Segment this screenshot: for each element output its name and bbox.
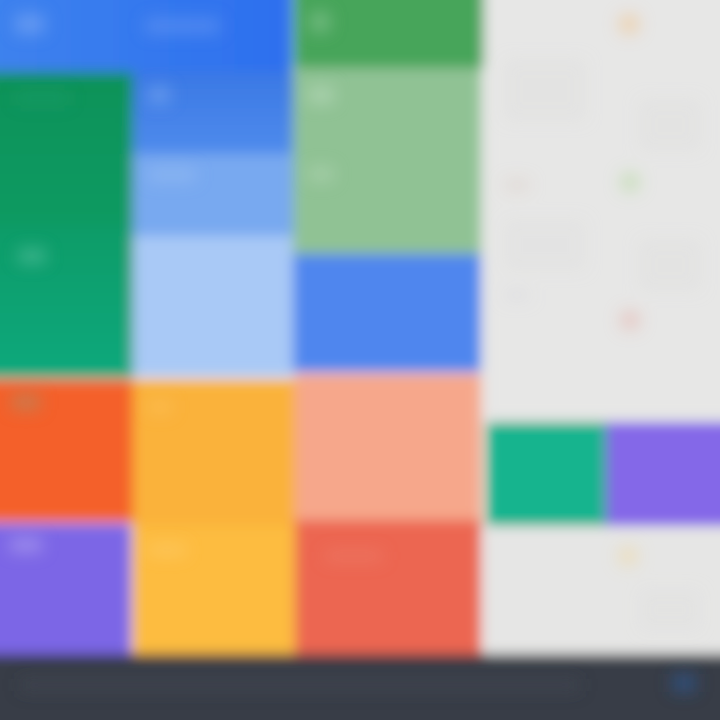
panel: lighter blue: [133, 154, 293, 236]
label mark: red: [325, 550, 383, 562]
icon mark: pink dot: [620, 310, 640, 330]
panel: yellow: [133, 526, 295, 654]
panel: teal: [0, 226, 133, 378]
label mark: orange red: [12, 394, 40, 410]
panel: orange red: [0, 380, 133, 522]
label mark: light green two: [308, 166, 334, 182]
text mark: grey column two: [505, 290, 529, 300]
panel: mid blue: [133, 72, 293, 154]
panel: grey upper right: [484, 0, 720, 420]
icon mark: orange dot: [619, 14, 639, 34]
panel: purple stat: [606, 422, 720, 526]
label mark: dark green: [15, 90, 70, 106]
heading mark: top blue right: [145, 18, 220, 34]
text mark: grey column one: [505, 180, 529, 190]
heading mark: top blue left: [15, 14, 45, 34]
label mark: yellow: [148, 544, 186, 556]
text mark: footer accent: [672, 674, 696, 692]
panel: pale blue: [133, 236, 293, 376]
text mark: grey texture four: [640, 240, 700, 290]
label mark: teal: [18, 248, 46, 264]
panel: red: [295, 520, 481, 654]
panel: top blue header: [0, 0, 292, 72]
panel: grey lower right: [484, 528, 720, 656]
panel: purple left: [0, 524, 131, 654]
panel: blue: [293, 254, 481, 372]
heading mark: top green: [310, 12, 330, 32]
label mark: light green one: [308, 86, 334, 104]
panel: salmon: [295, 374, 481, 520]
panel: top green header: [294, 0, 484, 68]
icon mark: amber dot: [618, 546, 638, 566]
label mark: mid blue: [148, 86, 170, 104]
text mark: grey texture five: [640, 590, 700, 630]
text mark: footer left: [20, 678, 580, 692]
panel: dark green: [0, 72, 133, 226]
text mark: grey texture three: [505, 220, 585, 270]
footer bar: [0, 654, 720, 720]
panel: teal stat: [487, 422, 606, 526]
panel: amber: [133, 380, 295, 526]
label mark: amber: [148, 400, 172, 414]
icon mark: green dot: [620, 172, 640, 192]
label mark: lighter blue: [148, 168, 196, 182]
text mark: grey texture two: [640, 100, 700, 150]
label mark: purple: [10, 538, 42, 552]
panel: light green: [293, 68, 481, 254]
text mark: grey texture one: [505, 60, 585, 120]
